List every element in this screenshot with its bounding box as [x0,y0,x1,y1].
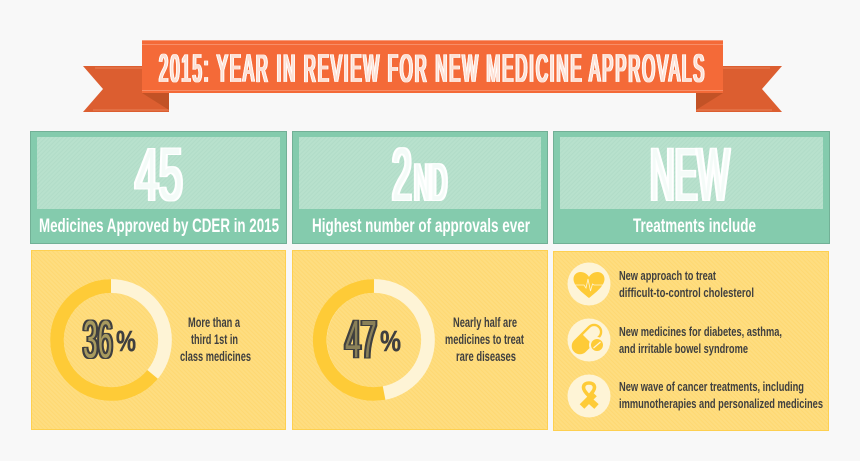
treatment text 3 [619,379,823,411]
icon: ribbon [568,374,610,418]
description: class medicines [180,349,251,364]
percent sign: % [116,326,136,358]
description [445,315,524,364]
big text 2ND: ND [414,153,447,212]
value 47: 47 [345,310,377,370]
big text 2ND: 2 [392,134,412,217]
donut chart 36% [57,286,165,394]
donut chart 47% [320,286,428,394]
percent sign: % [380,326,401,358]
treatment text 1: difficult-to-control cholesterol [619,285,754,300]
treatment text 1 [619,268,754,300]
icon: heart [568,262,610,306]
panel: new treatments [554,132,830,244]
description: Nearly half are [453,315,517,330]
banner right tail [696,66,782,112]
treatment text 1: New approach to treat [619,268,716,283]
big text NEW: NEW [650,134,730,217]
value 36: 36 [83,309,112,369]
description: third 1st in [191,332,238,347]
treatment text 2: New medicines for diabetes, asthma, [619,324,782,339]
description [180,315,251,364]
title text: 2015: YEAR IN REVIEW FOR NEW MEDICINE APPROVALS [159,48,704,91]
caption: Medicines Approved by CDER in 2015 [39,215,279,237]
description: More than a [188,315,240,330]
banner body [142,40,723,93]
banner left tail [83,66,169,112]
panel: 36 percent [32,250,286,430]
big number 45: 45 [135,133,183,216]
panel: 2nd highest [292,132,548,244]
panel: 47 percent [292,250,548,430]
description: medicines to treat [445,332,524,347]
description: rare diseases [456,349,516,364]
icon: pills [568,318,610,362]
panel: 45 medicines approved [30,132,286,244]
panel: treatments list [554,252,828,430]
treatment text 2: and irritable bowel syndrome [619,341,748,356]
caption: Treatments include [633,215,756,237]
big text 2ND [392,134,447,217]
treatment text 2 [619,324,782,356]
title banner [83,40,782,112]
caption: Highest number of approvals ever [312,215,530,237]
